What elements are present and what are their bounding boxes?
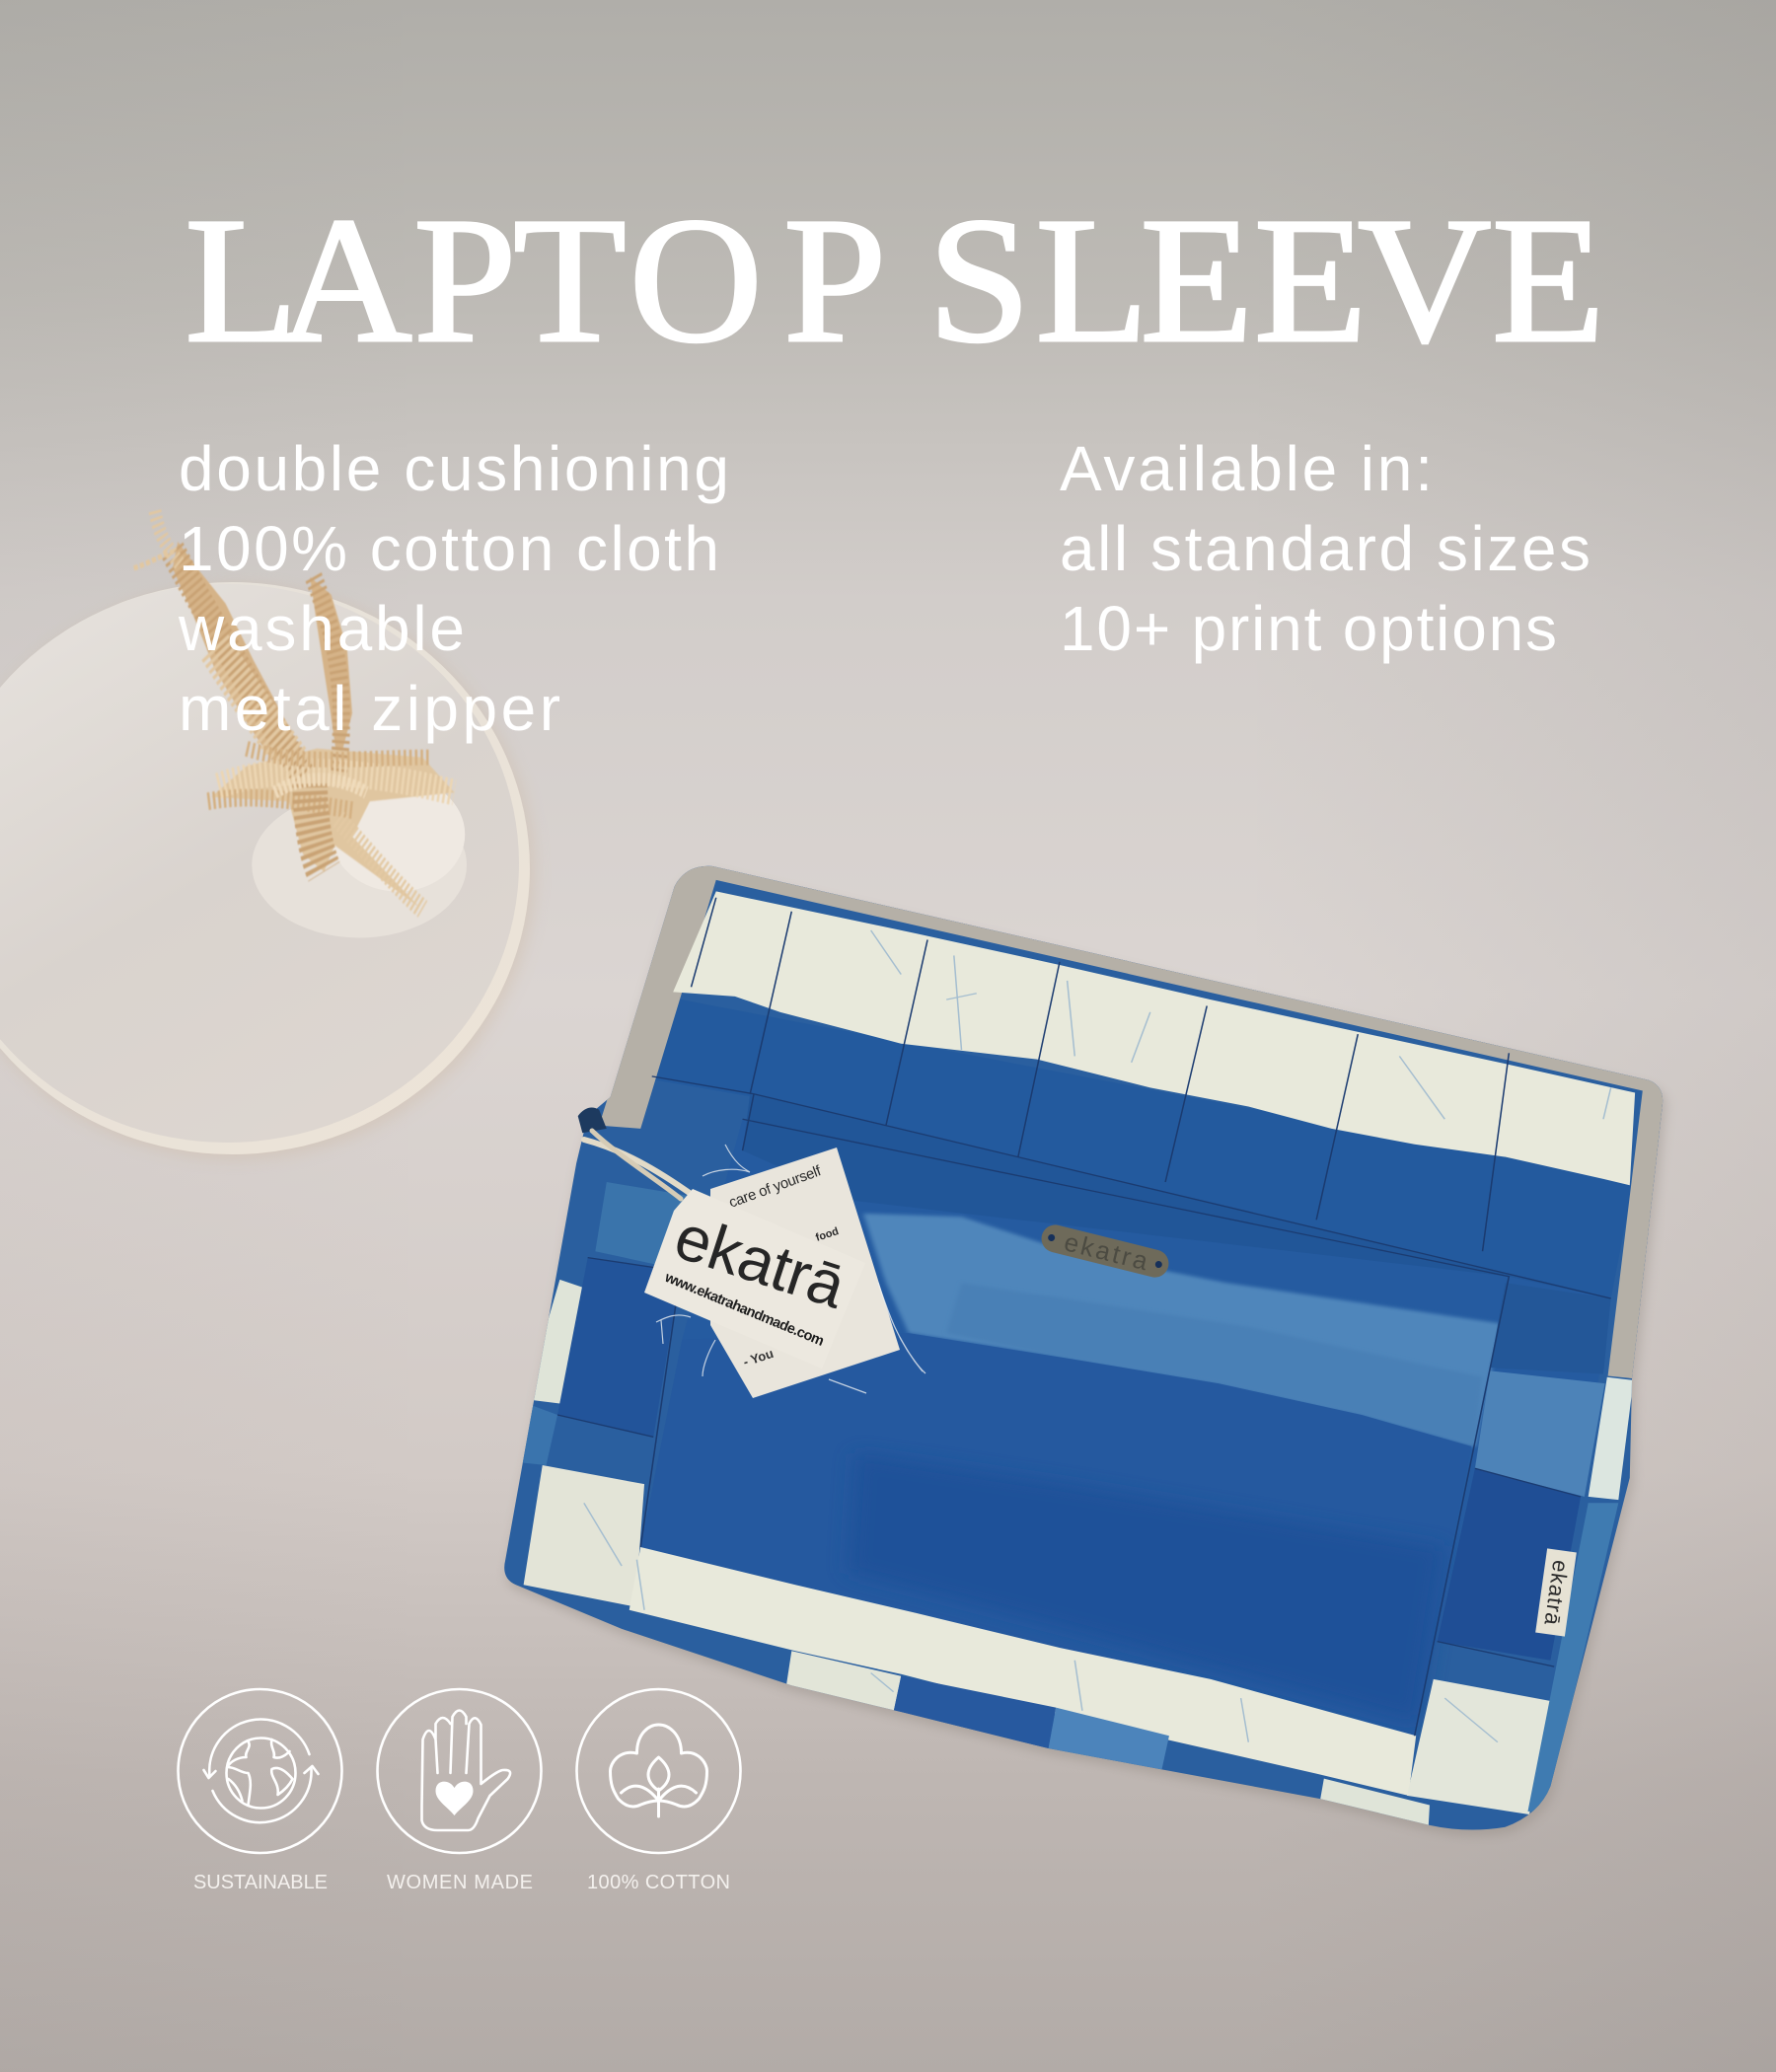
right light wash	[1475, 1370, 1605, 1497]
features list: 100% cotton cloth	[179, 513, 719, 584]
label: 100% COTTON	[587, 1872, 730, 1893]
availability list: 10+ print options	[1060, 593, 1557, 664]
quilting lines	[557, 898, 1611, 1736]
sewn label: ekatrā	[1539, 1559, 1573, 1627]
badge: sustainable	[178, 1689, 341, 1893]
right cream strip	[1589, 1377, 1634, 1500]
crackle lines	[584, 930, 1611, 1742]
top blue strip	[644, 994, 1634, 1298]
availability list: Available in:	[1060, 433, 1433, 504]
paper tag: front: ekatrā	[667, 1201, 854, 1322]
pocket top band	[743, 1094, 1611, 1298]
icon: globe with circular arrows	[178, 1689, 341, 1853]
zipper band	[599, 866, 1663, 1378]
paper tag: back: food	[814, 1225, 841, 1244]
bottom cream band	[629, 1547, 1416, 1796]
right dark column	[1438, 1468, 1581, 1661]
icon: hand with heart	[377, 1689, 541, 1853]
paper tag: front: www.ekatrahandmade.com	[662, 1270, 826, 1350]
paper tag: back: - You	[741, 1346, 776, 1369]
deep blue pocket body	[640, 1333, 1471, 1736]
features list: metal zipper	[179, 673, 560, 744]
icon: cotton boll	[576, 1689, 740, 1853]
features list	[178, 433, 729, 744]
light wash on pocket	[863, 1214, 1502, 1446]
paper tag: back: care of yourself	[727, 1162, 824, 1212]
availability list: all standard sizes	[1060, 513, 1591, 584]
title: LAPTOP SLEEVE	[185, 180, 1605, 379]
sewn label	[1535, 1548, 1577, 1637]
bottom strip patches	[786, 1651, 901, 1712]
paper tag: front	[644, 1189, 865, 1369]
photo: laptop sleeve	[504, 866, 1665, 1836]
paper tag: back	[710, 1147, 900, 1398]
dark panel behind quilting	[640, 1119, 1611, 1736]
rope tie	[584, 1131, 694, 1199]
label: WOMEN MADE	[387, 1872, 533, 1893]
photo: vase	[252, 777, 467, 937]
availability list	[1060, 433, 1591, 664]
left cream strip	[525, 1280, 588, 1404]
left dark column	[557, 1258, 681, 1437]
metal badge: ekatra	[1062, 1226, 1151, 1276]
features list: washable	[178, 593, 465, 664]
top cream band	[673, 891, 1635, 1185]
label: SUSTAINABLE	[193, 1872, 328, 1893]
loose threads	[656, 1145, 925, 1393]
right bottom cream block	[1407, 1679, 1552, 1814]
photo: dried grass	[134, 511, 455, 909]
zipper pull	[578, 1108, 607, 1133]
features list: double cushioning	[179, 433, 729, 504]
badge: women made	[377, 1689, 541, 1893]
photo: plate	[0, 582, 535, 1159]
left bottom cream block	[524, 1465, 644, 1607]
side edge wash	[516, 1402, 557, 1465]
metal badge	[1038, 1221, 1172, 1282]
badge: cotton	[576, 1689, 740, 1893]
